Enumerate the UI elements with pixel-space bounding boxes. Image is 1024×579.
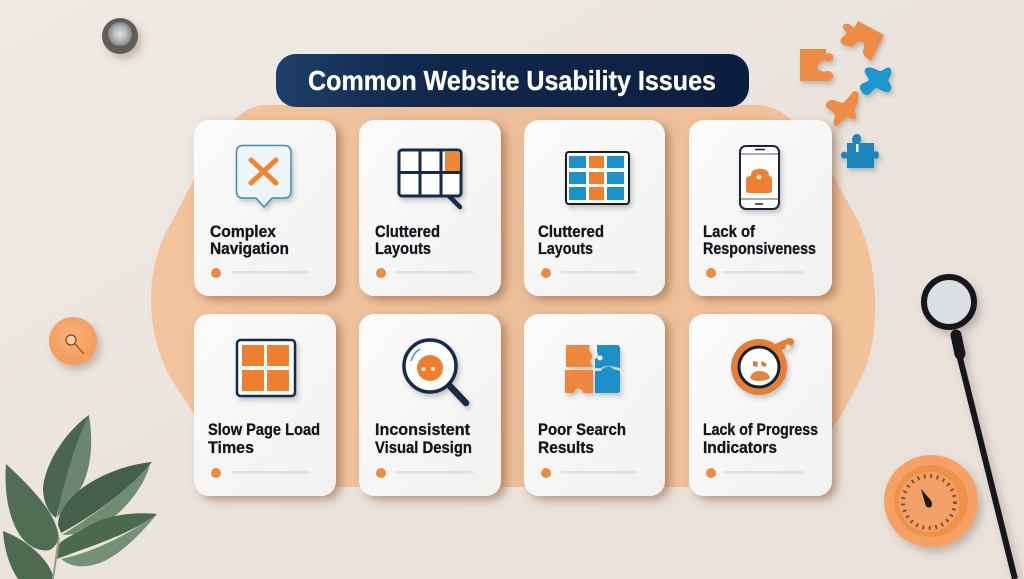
puzzle piece: bottom blue — [841, 134, 879, 168]
puzzle pieces decoration — [800, 21, 891, 168]
card: Inconsistent Visual Design — [359, 314, 501, 496]
progress marker — [706, 468, 803, 478]
icon: grid with magnifier handle — [399, 150, 461, 207]
leaf: upper right — [58, 462, 152, 533]
decorative magnifying glass — [924, 277, 1015, 579]
progress marker — [706, 268, 803, 278]
leaf: lower right — [57, 513, 157, 559]
icon: sad face dial — [731, 339, 790, 395]
icon: phone with lock — [740, 146, 779, 209]
puzzle piece: orange cross — [826, 91, 859, 126]
progress marker — [211, 468, 309, 478]
label: Poor Search — [538, 421, 626, 439]
card: Poor Search Results — [524, 314, 665, 496]
leaf: top — [43, 415, 89, 518]
progress marker — [541, 268, 636, 278]
stem — [53, 537, 59, 579]
card: Lack of Responsiveness — [689, 120, 832, 296]
decorative knob top left — [102, 18, 138, 54]
label: Times — [208, 439, 254, 457]
leaf highlight: lower right — [61, 514, 157, 566]
leaf highlight: top — [57, 415, 91, 518]
card: Complex Navigation — [194, 120, 336, 296]
label: Layouts — [538, 240, 593, 258]
leaf: upper left — [6, 464, 59, 550]
leaf highlight: upper right — [62, 464, 150, 535]
progress marker — [541, 468, 636, 478]
icon: four orange tiles — [237, 340, 295, 396]
label: Visual Design — [375, 439, 472, 457]
decorative orange search button — [49, 317, 97, 365]
label: Lack of Progress — [703, 421, 818, 439]
card: Slow Page Load Times — [194, 314, 336, 496]
leaf: lower left — [3, 531, 54, 579]
icon: puzzle pieces — [565, 345, 620, 393]
puzzle piece: blue — [860, 67, 891, 95]
label: Layouts — [375, 240, 431, 258]
puzzle piece: top orange — [840, 21, 884, 61]
decorative orange gauge — [884, 455, 978, 547]
icon: colour grid — [566, 152, 629, 204]
label: Results — [538, 439, 594, 457]
card: Cluttered Layouts — [359, 120, 501, 296]
title: Common Website Usability Issues — [308, 65, 716, 96]
card: Cluttered Layouts (colour grid) — [524, 120, 665, 296]
card: Lack of Progress Indicators — [689, 314, 832, 496]
icon: speech box with X — [236, 146, 291, 207]
progress marker — [376, 468, 474, 478]
label: Inconsistent — [375, 421, 470, 439]
label: Slow Page Load — [208, 421, 320, 439]
peach backdrop shape — [151, 105, 875, 487]
progress marker — [376, 268, 474, 278]
title banner — [276, 54, 749, 107]
label: Lack of — [703, 223, 755, 241]
label: Indicators — [703, 439, 777, 457]
label: Cluttered — [375, 223, 440, 241]
puzzle piece: left orange — [800, 49, 833, 81]
label: Navigation — [210, 240, 289, 258]
decorative leaves — [3, 415, 157, 579]
label: Complex — [210, 223, 277, 241]
label: Cluttered — [538, 223, 604, 241]
icon: magnifier with face — [404, 340, 466, 403]
label: Responsiveness — [703, 240, 816, 258]
progress marker — [211, 268, 308, 278]
